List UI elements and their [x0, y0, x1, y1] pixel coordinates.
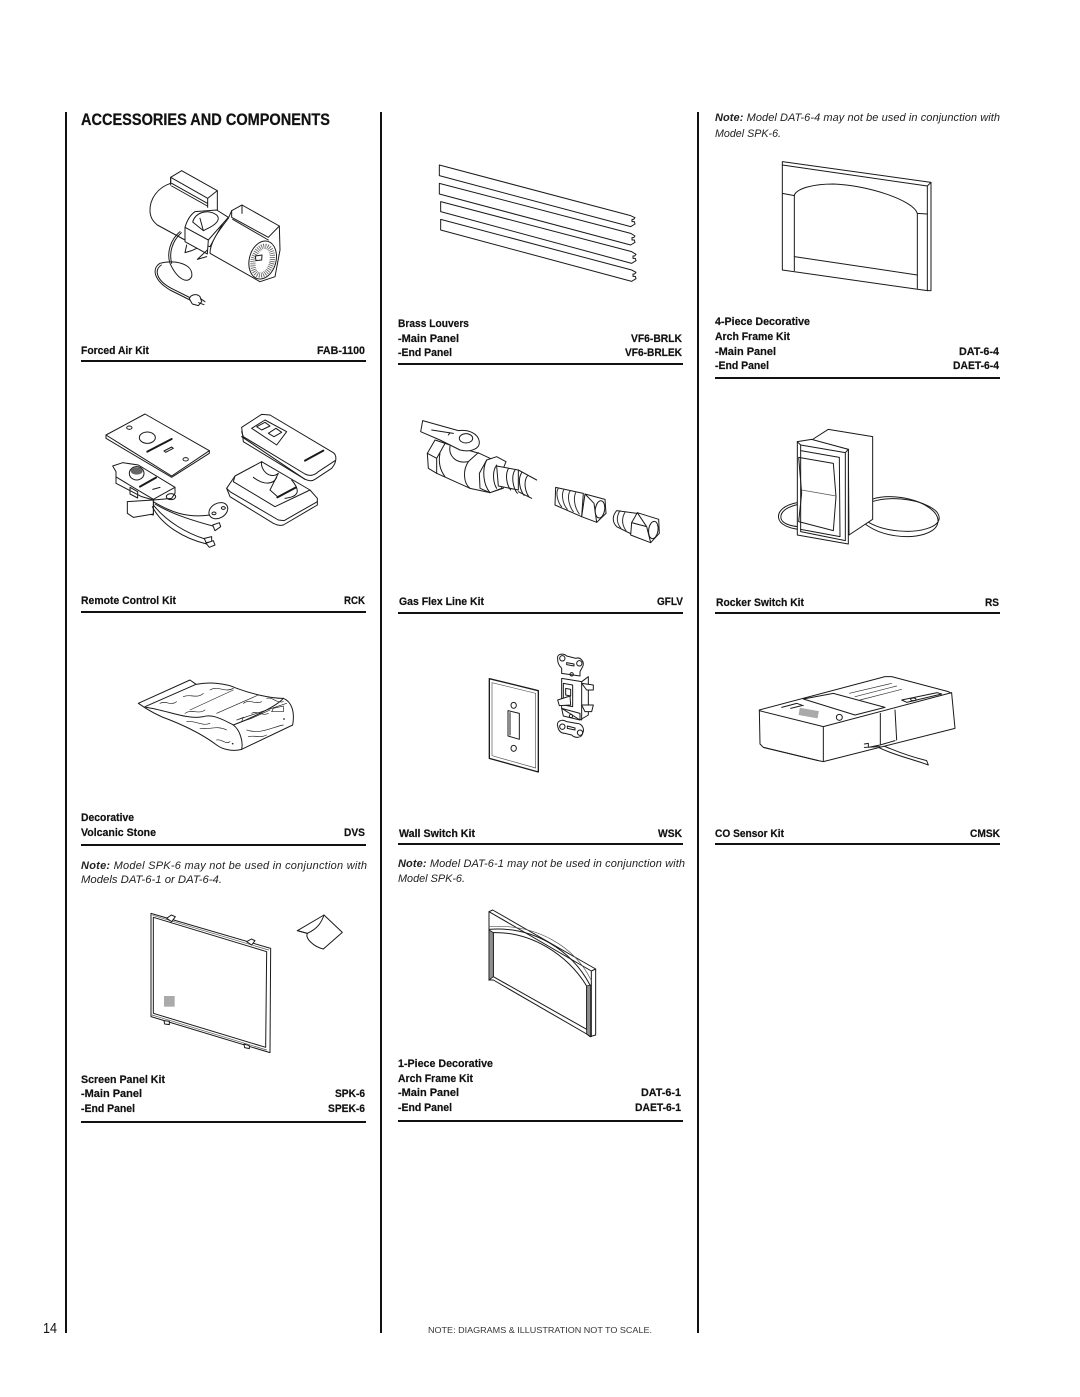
footnote: not to scale: NOTE: DIAGRAMS & ILLUSTRATION NOT TO SCALE.	[428, 1325, 652, 1335]
part number: DAT-6-1: DAT-6-1	[641, 1087, 681, 1099]
note: second line: Model SPK-6.	[398, 873, 465, 885]
part number: FAB-1100: FAB-1100	[317, 345, 365, 357]
label: brass louvers: Brass Louvers	[398, 318, 469, 330]
part number: CMSK: CMSK	[970, 828, 1001, 840]
label: end panel: -End Panel	[398, 1102, 452, 1114]
label: gas flex line kit: Gas Flex Line Kit	[399, 596, 484, 608]
label: main panel: -Main Panel	[398, 1087, 459, 1099]
panel: CO sensor kit	[715, 677, 1001, 845]
illustration: shutoff valve and flex line	[421, 421, 659, 543]
label: arch frame kit: Arch Frame Kit	[398, 1073, 473, 1085]
part number: RS: RS	[985, 597, 999, 609]
label: main panel: -Main Panel	[715, 346, 776, 358]
column dividers	[65, 112, 699, 1333]
part number: DAET-6-1: DAET-6-1	[635, 1102, 681, 1114]
label: end panel: -End Panel	[81, 1103, 135, 1115]
label: decorative: Decorative	[81, 812, 134, 824]
label: wall switch kit: Wall Switch Kit	[399, 828, 475, 840]
label: rocker switch kit: Rocker Switch Kit	[716, 597, 804, 609]
panel: gas flex line kit	[398, 421, 683, 614]
illustration: wall plate and switch	[489, 654, 593, 772]
label: screen panel kit: Screen Panel Kit	[81, 1074, 165, 1086]
illustration: rocker switch	[778, 429, 941, 544]
illustration: 4-piece arch frame	[782, 162, 931, 291]
illustration: screen panel	[151, 913, 342, 1053]
panel: decorative volcanic stone	[81, 680, 366, 846]
label: arch frame kit: Arch Frame Kit	[715, 331, 790, 343]
label: volcanic stone: Volcanic Stone	[81, 827, 156, 839]
label: CO sensor kit: CO Sensor Kit	[715, 828, 784, 840]
panel: remote control kit	[81, 414, 366, 613]
illustration: 1-piece arch frame	[489, 910, 596, 1037]
label: 1-piece decorative: 1-Piece Decorative	[398, 1058, 493, 1070]
illustration: remote control set	[106, 414, 336, 547]
part number: SPEK-6: SPEK-6	[328, 1103, 365, 1115]
note: DAT-6-4 conjunction: Note: Model DAT-6-4 may not be used in conjunction with	[715, 112, 1000, 124]
title: ACCESSORIES AND COMPONENTS	[81, 110, 330, 129]
note: second line: Models DAT-6-1 or DAT-6-4.	[81, 874, 222, 886]
illustration: forced air blower	[150, 171, 281, 306]
part number: WSK: WSK	[658, 828, 683, 840]
illustration: CO sensor box	[759, 677, 955, 765]
panel: brass louvers	[398, 165, 683, 365]
part number: DVS: DVS	[344, 827, 365, 839]
panel: 4-piece arch frame kit	[715, 162, 1000, 379]
part number: DAET-6-4: DAET-6-4	[953, 360, 1000, 372]
part number: VF6-BRLEK: VF6-BRLEK	[625, 347, 683, 359]
panel: wall switch kit	[398, 654, 683, 845]
label: end panel: -End Panel	[715, 360, 769, 372]
illustration: bag of volcanic stone	[138, 680, 293, 750]
note: SPK-6 conjunction: Note: Model SPK-6 may not be used in conjunction with	[81, 860, 367, 872]
part number: DAT-6-4: DAT-6-4	[959, 346, 1000, 358]
note: DAT-6-1 conjunction: Note: Model DAT-6-1 may not be used in conjunction with	[398, 858, 685, 870]
label: forced air kit: Forced Air Kit	[81, 345, 149, 357]
panel: rocker switch kit	[715, 429, 1000, 614]
panel: screen panel kit	[81, 913, 366, 1123]
note: second line: Model SPK-6.	[715, 128, 781, 140]
illustration: four louver strips	[439, 165, 636, 281]
part number: VF6-BRLK: VF6-BRLK	[631, 333, 683, 345]
panel: 1-piece arch frame kit	[398, 910, 683, 1122]
part number: RCK: RCK	[344, 595, 366, 607]
label: remote control kit: Remote Control Kit	[81, 595, 176, 607]
panel: forced air kit	[81, 171, 366, 362]
page number: 14	[43, 1320, 57, 1337]
label: main panel: -Main Panel	[81, 1088, 142, 1100]
part number: GFLV: GFLV	[657, 596, 683, 608]
part number: SPK-6: SPK-6	[335, 1088, 365, 1100]
label: main panel: -Main Panel	[398, 333, 459, 345]
label: end panel: -End Panel	[398, 347, 452, 359]
label: 4-piece decorative: 4-Piece Decorative	[715, 316, 810, 328]
